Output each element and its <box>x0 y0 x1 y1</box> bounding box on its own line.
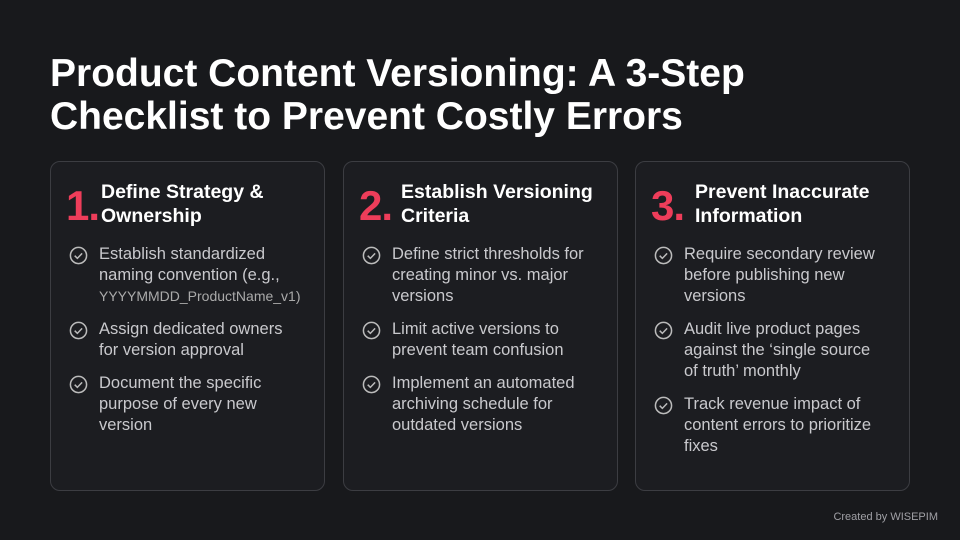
list 3: content errors to prioritize <box>684 416 871 434</box>
list 1: for version approval <box>99 341 244 359</box>
number 3: 3. <box>651 182 684 229</box>
list 2 <box>362 245 584 434</box>
title: Product Content Versioning: A 3-Step <box>50 52 745 95</box>
list 3: before publishing new <box>684 266 845 284</box>
list 1: Establish standardized naming convention (e.g., YYYYMMDD_ProductName_v1) <box>99 245 301 304</box>
list 3: fixes <box>684 437 718 455</box>
heading 1: Define Strategy & <box>101 181 264 203</box>
list 2: archiving schedule for <box>392 395 553 413</box>
list 3: versions <box>684 287 745 305</box>
heading 1 <box>101 181 264 227</box>
list 2: outdated versions <box>392 416 522 434</box>
list 2: Limit active versions to <box>392 320 559 338</box>
heading 3: Prevent Inaccurate <box>695 181 870 203</box>
list 2: Implement an automated <box>392 374 575 392</box>
heading 2: Criteria <box>401 205 469 227</box>
list 1 <box>70 245 301 434</box>
list 2: Define strict thresholds for <box>392 245 584 263</box>
list 3 <box>654 245 875 455</box>
list 2: versions <box>392 287 453 305</box>
heading 1: Ownership <box>101 205 202 227</box>
list 1: purpose of every new <box>99 395 257 413</box>
number 1: 1. <box>66 182 99 229</box>
heading 2: Establish Versioning <box>401 181 593 203</box>
title: Checklist to Prevent Costly Errors <box>50 95 683 138</box>
list 2: creating minor vs. major <box>392 266 568 284</box>
footer credit: Created by WISEPIM <box>833 511 938 523</box>
list 1: Assign dedicated owners <box>99 320 282 338</box>
list 3: Track revenue impact of <box>684 395 860 413</box>
panel: step 2 <box>343 161 618 491</box>
list 2: prevent team confusion <box>392 341 564 359</box>
panel: step 3 <box>635 161 910 491</box>
list 3: of truth’ monthly <box>684 362 801 380</box>
title <box>50 52 745 138</box>
list 1: version <box>99 416 152 434</box>
number 2: 2. <box>359 182 392 229</box>
list 1: Document the specific <box>99 374 261 392</box>
list 3: Audit live product pages <box>684 320 860 338</box>
list 3: against the ‘single source <box>684 341 870 359</box>
heading 3: Information <box>695 205 802 227</box>
heading 3 <box>695 181 870 227</box>
panel: step 1 <box>50 161 325 491</box>
heading 2 <box>401 181 593 227</box>
list 3: Require secondary review <box>684 245 875 263</box>
